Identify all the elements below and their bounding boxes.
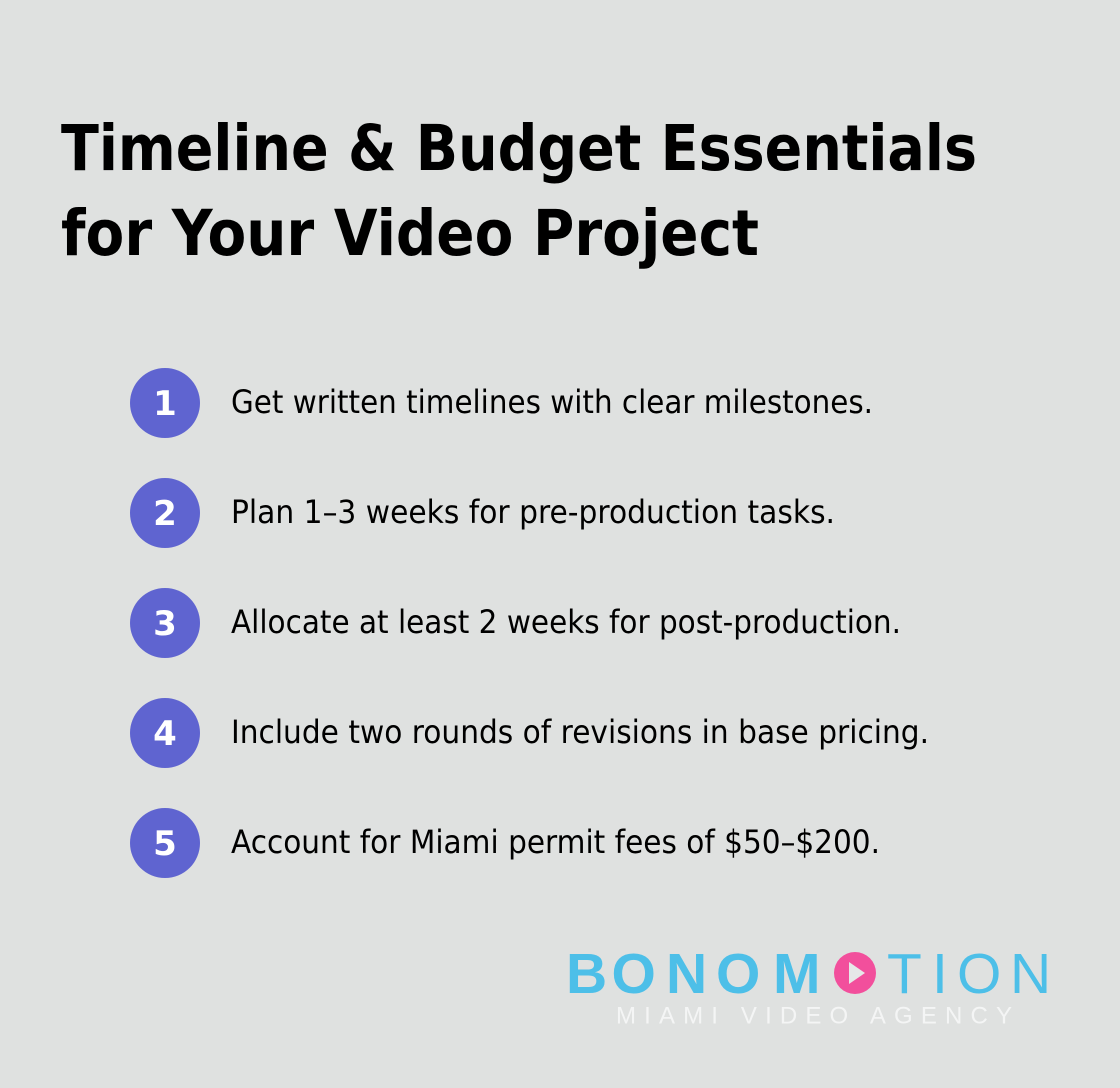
item 1	[130, 368, 873, 438]
logo: Bonomotion	[566, 942, 1051, 1030]
list of items	[130, 368, 929, 878]
title	[61, 112, 977, 270]
item 3: 3	[153, 604, 177, 644]
icon: play button	[834, 952, 876, 994]
logo: Bonomotion: BONOM	[566, 942, 820, 1006]
item 5	[130, 808, 880, 878]
item 4: Include two rounds of revisions in base pricing.	[231, 713, 929, 751]
title: Timeline & Budget Essentials	[61, 112, 977, 185]
item 3: Allocate at least 2 weeks for post-production.	[231, 603, 901, 641]
logo: Bonomotion: MIAMI VIDEO AGENCY	[616, 1002, 1012, 1030]
item 4: 4	[153, 714, 177, 754]
item 2	[130, 478, 835, 548]
item 3	[130, 588, 901, 658]
item 4	[130, 698, 929, 768]
title: for Your Video Project	[61, 197, 759, 270]
item 1: Get written timelines with clear milestones.	[231, 383, 873, 421]
item 2: 2	[153, 494, 177, 534]
item 1: 1	[153, 384, 177, 424]
logo: Bonomotion: TION	[887, 942, 1051, 1006]
item 5: Account for Miami permit fees of $50–$200.	[231, 823, 880, 861]
item 5: 5	[153, 824, 177, 864]
item 2: Plan 1–3 weeks for pre-production tasks.	[231, 493, 835, 531]
